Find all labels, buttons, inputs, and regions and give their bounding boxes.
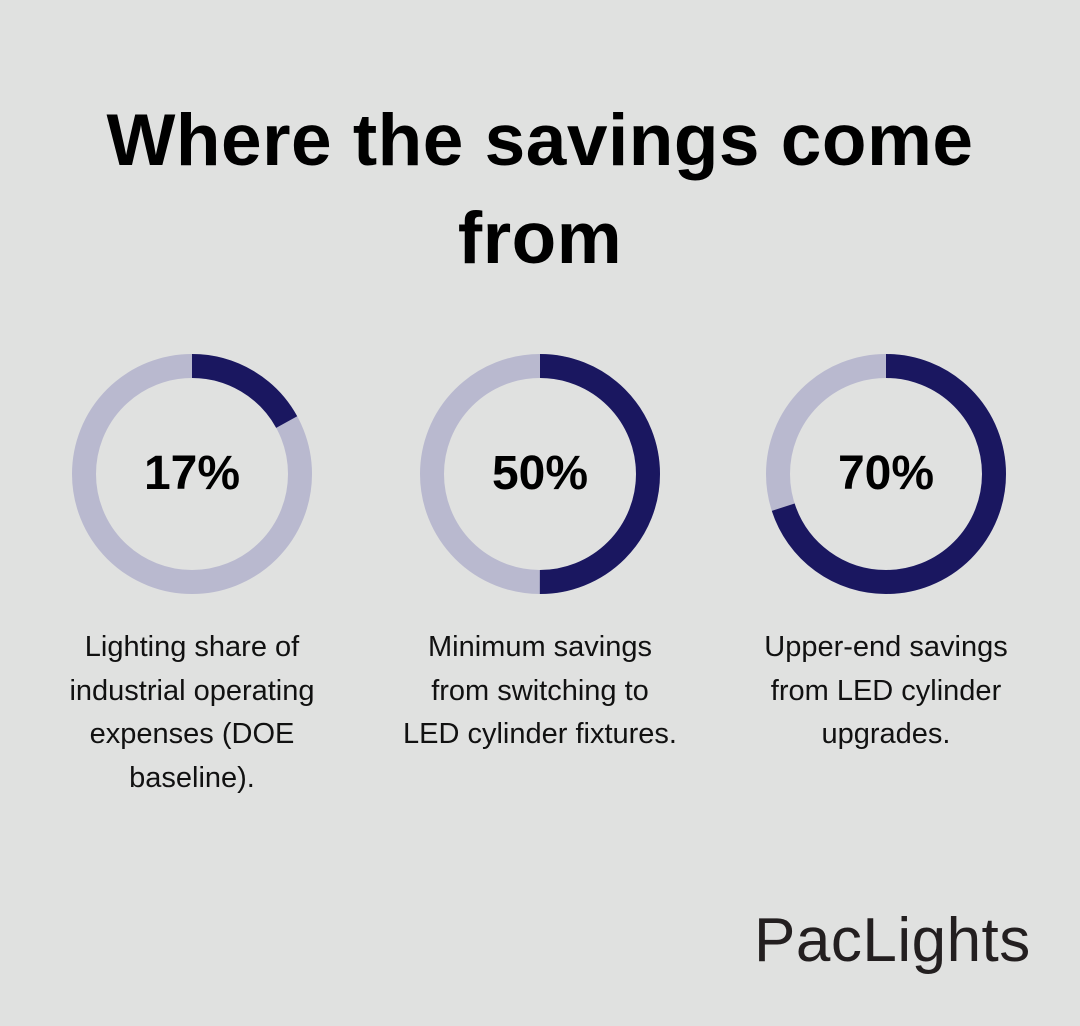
value: 50%: 50% <box>492 447 588 500</box>
donut: 17% <box>72 354 312 594</box>
caption: 17%: industrial operating <box>69 674 315 706</box>
caption: 70%: upgrades. <box>822 718 950 750</box>
donut: 50% <box>420 354 660 594</box>
title: from <box>458 198 622 279</box>
caption: 50%: LED cylinder fixtures. <box>403 718 677 750</box>
caption: 70% <box>764 631 1008 750</box>
caption: 17%: Lighting share of <box>85 631 299 663</box>
caption: 70%: Upper-end savings <box>764 631 1008 663</box>
value: 70%: 70% <box>838 447 934 500</box>
caption: 50%: Minimum savings <box>428 631 652 663</box>
title: Where the savings come <box>106 100 974 181</box>
value: 17%: 17% <box>144 447 240 500</box>
caption: 50% <box>403 631 677 750</box>
caption: 17%: baseline). <box>129 762 255 794</box>
caption: 50%: from switching to <box>431 674 649 706</box>
logo: PacLights <box>754 906 1031 975</box>
caption: 17% <box>69 631 315 794</box>
caption: 70%: from LED cylinder <box>771 674 1001 706</box>
caption: 17%: expenses (DOE <box>90 718 294 750</box>
title <box>106 100 974 279</box>
donut: 70% <box>766 354 1006 594</box>
